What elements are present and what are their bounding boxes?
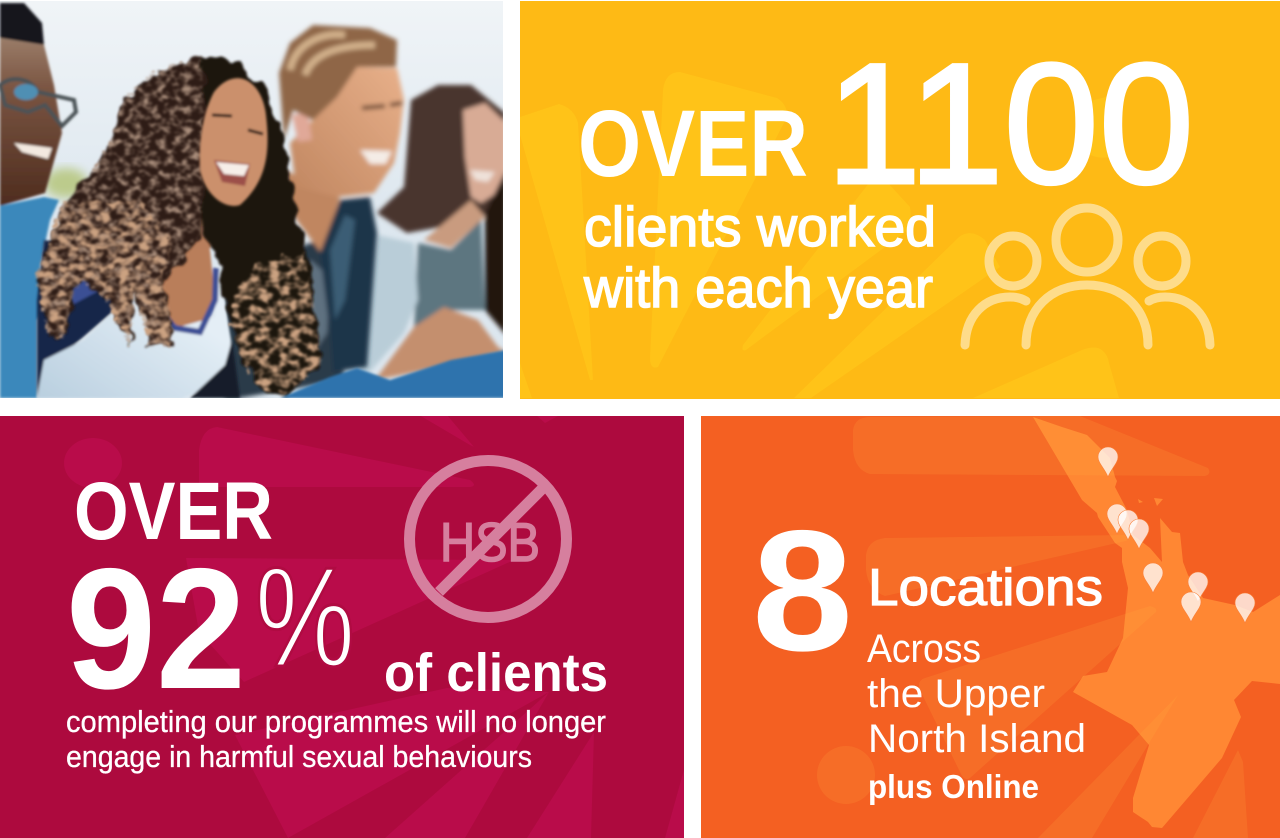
big number: 8: 8: [752, 495, 853, 687]
pin: Gisborne direction: [1235, 593, 1255, 623]
percent sign: %: [255, 538, 355, 697]
icon: no HSB sign: HSB: [440, 511, 540, 573]
label: plus Online: plus Online: [868, 768, 1039, 805]
big number: 92: 92: [66, 533, 246, 725]
map: islands: [1138, 498, 1163, 506]
pin: far north: [1098, 447, 1118, 477]
heading: Locations: Locations: [868, 559, 1103, 617]
pin: Bay of Plenty: [1188, 572, 1208, 602]
pin: Auckland central: [1118, 510, 1138, 540]
heading: OVER: OVER: [74, 466, 273, 557]
person 1: [0, 3, 76, 398]
pin: Auckland south: [1129, 519, 1149, 549]
photo: group of four smiling young people: [0, 1, 506, 398]
description: Across the Upper North Island: North Island: [868, 717, 1086, 761]
person 4 (out of focus): [360, 85, 506, 380]
description: engage in harmful sexual behaviours: [66, 739, 532, 774]
person 3 (out of focus): [225, 25, 404, 398]
pin: Waikato: [1143, 563, 1163, 593]
background rays: [520, 72, 1119, 398]
icon: three people: [965, 208, 1210, 345]
icon: no HSB sign: [410, 460, 566, 618]
heading: OVER: OVER: [578, 91, 808, 197]
description: [66, 704, 606, 774]
map: upper North Island: [1033, 417, 1280, 828]
pin: Auckland west: [1107, 504, 1127, 534]
panel: programme outcome: [0, 415, 690, 838]
panel: locations: [701, 416, 1280, 838]
description: Across the Upper North Island: Across: [867, 627, 981, 671]
caption: clients worked with each year: [583, 195, 936, 319]
background rays: [817, 416, 1248, 838]
panel: clients per year: [520, 1, 1280, 399]
description: Across the Upper North Island: the Upper: [867, 672, 1045, 716]
big number: 1100: 1100: [826, 28, 1194, 220]
person 2: clothing and skin: [35, 218, 242, 398]
description: completing our programmes will no longer: [66, 704, 606, 739]
map pins: [1098, 447, 1255, 623]
caption: clients worked with each year: clients worked: [584, 195, 936, 258]
background rays: [64, 415, 690, 838]
pin: Rotorua: [1181, 592, 1201, 622]
person 2: curly hair: [37, 55, 322, 397]
caption: clients worked with each year: with each year: [583, 256, 933, 319]
description: Across the Upper North Island: [867, 634, 1084, 752]
person 2: face: [200, 78, 506, 398]
label: of clients: of clients: [384, 643, 608, 703]
